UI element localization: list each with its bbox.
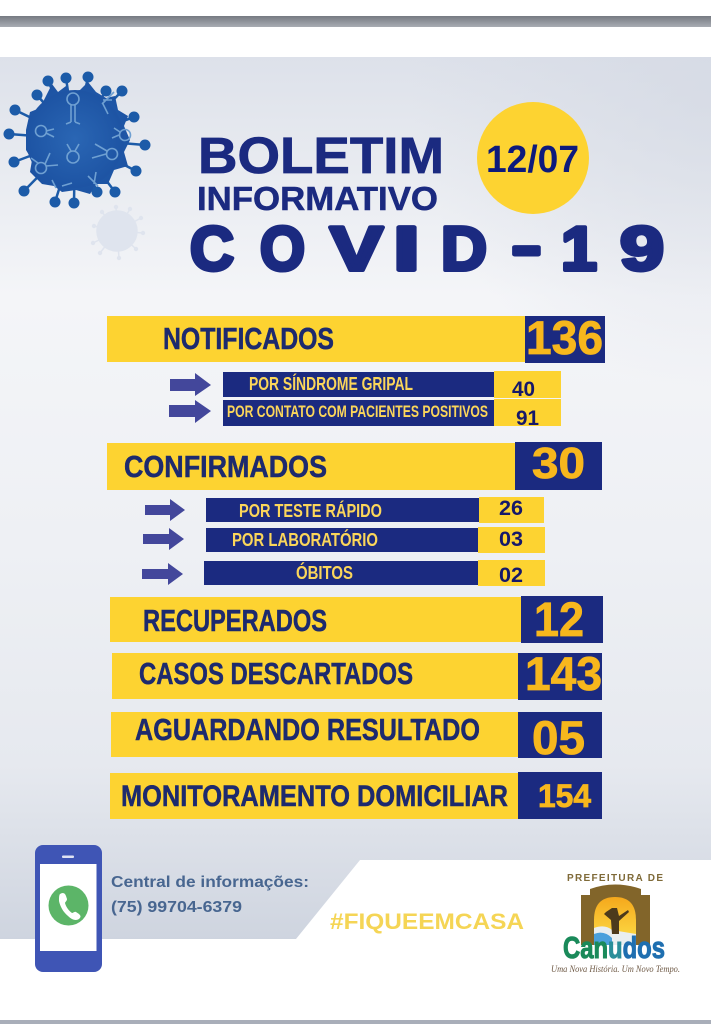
row: monitoramento domiciliar: 154 — [538, 778, 591, 814]
row: casos descartados: 143 — [525, 647, 602, 700]
row: obitos: ÓBITOS — [296, 562, 353, 583]
arrow — [145, 499, 185, 521]
hashtag: #FIQUEEMCASA — [330, 909, 524, 934]
logo: prefeitura de canudos: PREFEITURA DE — [567, 873, 663, 884]
row: confirmados — [107, 439, 602, 490]
row: por contato com pacientes positivos — [223, 399, 561, 430]
row: aguardando resultado: AGUARDANDO RESULTADO — [135, 712, 480, 747]
arrow — [169, 400, 211, 423]
title: covid-19: - — [512, 212, 542, 281]
white footer panel — [0, 860, 711, 1020]
date badge — [477, 102, 589, 214]
bottom gray band — [0, 1020, 711, 1024]
arrow — [170, 373, 211, 396]
title: covid-19 — [190, 212, 664, 284]
title: covid-19: 1 — [561, 215, 597, 284]
row: casos descartados: CASOS DESCARTADOS — [139, 656, 413, 691]
row: recuperados: RECUPERADOS — [143, 603, 327, 638]
row: por laboratorio: 03 — [499, 528, 523, 551]
logo arch — [581, 884, 650, 945]
row: aguardando resultado: 05 — [532, 711, 585, 764]
title: covid-19: V — [330, 215, 383, 284]
row: confirmados: CONFIRMADOS — [124, 449, 327, 484]
title: boletim informativo: BOLETIM — [198, 127, 444, 184]
contact text: Central de informações: — [111, 874, 309, 891]
row: notificados: 136 — [526, 311, 603, 364]
title: boletim informativo — [197, 127, 444, 217]
contact text — [111, 874, 309, 916]
arrow — [142, 563, 183, 585]
contact text: (75) 99704-6379 — [111, 899, 242, 916]
logo: prefeitura de canudos: Uma Nova História. Um Novo Tempo. — [551, 964, 680, 974]
row: casos descartados — [112, 647, 602, 700]
row: por teste rapido: 26 — [499, 497, 523, 520]
top gray band — [0, 16, 711, 27]
title: covid-19: O — [260, 215, 305, 284]
row: por laboratorio — [206, 527, 545, 553]
title: covid-19: 9 — [620, 215, 664, 284]
title: covid-19: I — [393, 215, 420, 284]
row: aguardando resultado — [111, 711, 602, 764]
row: recuperados — [110, 594, 603, 647]
row: por sindrome gripal: POR SÍNDROME GRIPAL — [249, 373, 413, 394]
row: confirmados: 30 — [532, 439, 585, 488]
logo wordmark: Canudos — [563, 930, 665, 965]
row: por teste rapido: POR TESTE RÁPIDO — [239, 500, 382, 521]
large virus icon — [4, 72, 150, 208]
row: por sindrome gripal: 40 — [512, 378, 535, 401]
title: boletim informativo: INFORMATIVO — [197, 180, 438, 217]
small faded virus icon — [91, 205, 145, 260]
row: obitos — [204, 560, 545, 587]
row: por contato com pacientes positivos: 91 — [516, 407, 539, 430]
row: obitos: 02 — [499, 564, 523, 587]
row: por teste rapido — [206, 497, 544, 523]
icon: phone — [35, 845, 102, 972]
row: recuperados: 12 — [534, 594, 584, 647]
title: covid-19: C — [190, 215, 234, 284]
arrow — [143, 528, 184, 550]
row: monitoramento domiciliar — [110, 772, 602, 819]
row: monitoramento domiciliar: MONITORAMENTO DOMICILIAR — [121, 780, 508, 813]
title: covid-19: D — [441, 215, 487, 284]
logo: prefeitura de canudos — [551, 873, 680, 974]
row: notificados: NOTIFICADOS — [163, 321, 334, 356]
row: por sindrome gripal — [223, 371, 561, 401]
row: notificados — [107, 311, 605, 364]
row: por contato com pacientes positivos: POR CONTATO COM PACIENTES POSITIVOS — [227, 403, 488, 421]
row: por laboratorio: POR LABORATÓRIO — [232, 529, 378, 550]
date badge: 12/07 — [486, 139, 579, 181]
